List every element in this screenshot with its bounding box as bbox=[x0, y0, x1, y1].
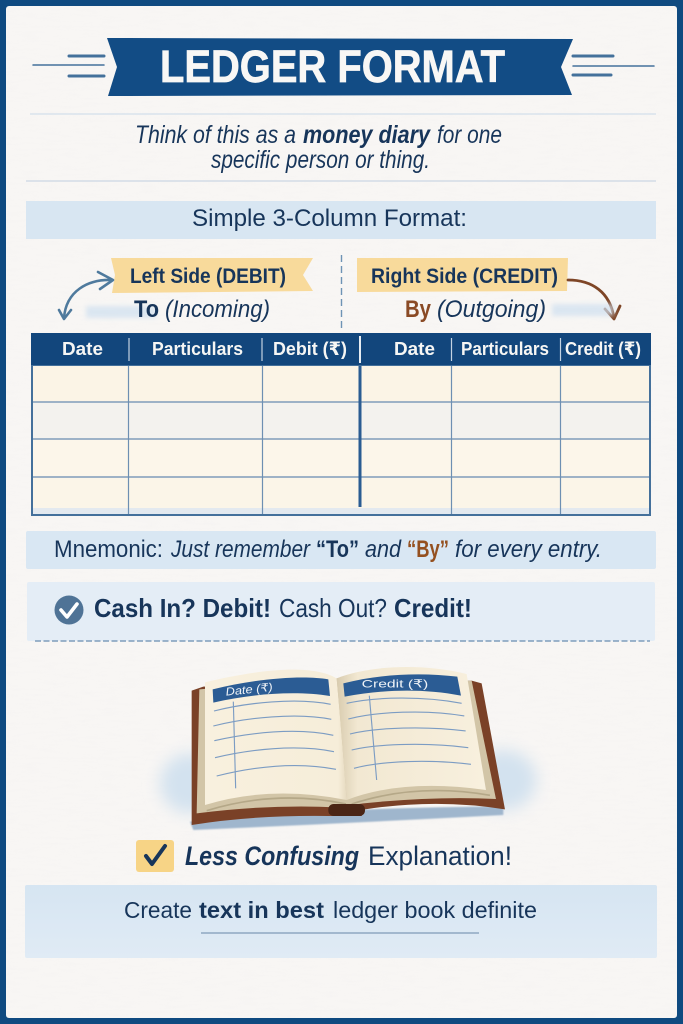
intro text: specific person or thing. bbox=[211, 146, 430, 174]
less confusing line: Explanation! bbox=[368, 841, 512, 871]
table header row: Particulars bbox=[461, 338, 549, 359]
section heading band bbox=[26, 201, 656, 239]
less confusing line: Less Confusing bbox=[185, 841, 359, 871]
mnemonic band: and bbox=[365, 536, 402, 563]
icon: check circle bbox=[54, 596, 84, 624]
section heading band: Simple 3-Column Format: bbox=[192, 205, 467, 232]
right side credit tag bbox=[357, 258, 568, 292]
right page header: Credit (₹) bbox=[362, 678, 429, 690]
title banner: LEDGER FORMAT bbox=[160, 41, 505, 92]
table header row: Credit (₹) bbox=[565, 338, 641, 359]
mnemonic band bbox=[26, 531, 656, 569]
intro text: money diary bbox=[303, 121, 431, 149]
by outgoing label: By bbox=[405, 296, 432, 323]
center dashed divider bbox=[340, 255, 342, 331]
cash in cash out band: Credit! bbox=[394, 593, 472, 623]
intro text bbox=[26, 114, 656, 181]
bottom band: ledger book definite bbox=[333, 897, 537, 923]
left page header bbox=[213, 677, 330, 703]
right page header bbox=[343, 674, 461, 697]
mnemonic band: for every entry. bbox=[455, 536, 602, 563]
to incoming label: (Incoming) bbox=[165, 296, 270, 323]
table header row: Date bbox=[62, 338, 103, 359]
to incoming label bbox=[86, 296, 270, 323]
bottom band: text in best bbox=[199, 897, 324, 923]
cash in cash out band: Cash Out? bbox=[279, 593, 387, 623]
table header row: Date bbox=[394, 338, 435, 359]
less confusing line bbox=[136, 840, 512, 872]
left page header: Date (₹) bbox=[225, 682, 274, 699]
bottom band bbox=[25, 885, 657, 958]
left side debit tag bbox=[111, 258, 313, 293]
intro text: Think of this as a bbox=[135, 121, 296, 149]
mnemonic band: “By” bbox=[407, 536, 449, 563]
cash in cash out band: Cash In? Debit! bbox=[94, 593, 271, 623]
left side debit tag: Left Side (DEBIT) bbox=[130, 265, 286, 288]
intro text: for one bbox=[437, 121, 502, 149]
arrow: credit curve bbox=[568, 280, 620, 319]
bottom band: Create bbox=[124, 897, 192, 923]
icon: open ledger book bbox=[160, 667, 537, 830]
right side credit tag: Right Side (CREDIT) bbox=[371, 265, 558, 288]
table header row: Debit (₹) bbox=[273, 338, 347, 359]
ruled lines bbox=[213, 696, 471, 788]
table header row bbox=[31, 333, 651, 365]
arrow: debit curve bbox=[59, 272, 113, 319]
cash in cash out band bbox=[27, 582, 655, 641]
mnemonic band: Mnemonic: bbox=[54, 536, 163, 563]
by outgoing label bbox=[405, 296, 614, 323]
speed lines right bbox=[573, 56, 654, 75]
speed lines left bbox=[33, 56, 104, 76]
mnemonic band: “To” bbox=[316, 536, 359, 563]
table header row: Particulars bbox=[152, 338, 243, 359]
icon: yellow checkbox bbox=[136, 840, 174, 872]
by outgoing label: (Outgoing) bbox=[437, 296, 546, 323]
mnemonic band: Just remember bbox=[170, 536, 311, 563]
to incoming label: To bbox=[134, 296, 159, 323]
ledger table bbox=[31, 333, 651, 515]
